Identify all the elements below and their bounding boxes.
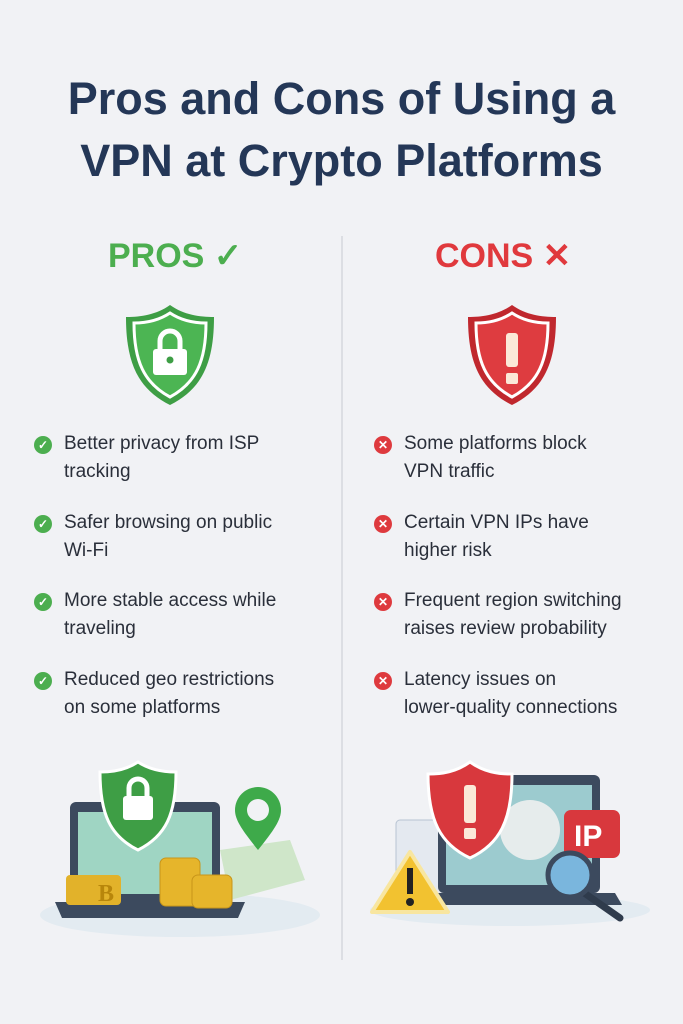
list: cons: Latency issues on bbox=[404, 669, 556, 690]
list: pros: Wi-Fi bbox=[64, 540, 108, 561]
illustration: cons laptop bbox=[370, 760, 650, 926]
heading: cons: CONS ✕ bbox=[435, 237, 571, 275]
illustration: pros laptop bbox=[40, 760, 320, 937]
list: pros: Better privacy from ISP bbox=[64, 433, 259, 454]
list: pros: ✓ bbox=[38, 595, 48, 609]
heading: pros: PROS ✓ bbox=[108, 237, 242, 275]
con item 3 bbox=[374, 590, 622, 639]
list: cons bbox=[374, 433, 622, 718]
list: cons: raises review probability bbox=[404, 618, 607, 639]
list: cons: Certain VPN IPs have bbox=[404, 512, 589, 533]
list: pros: ✓ bbox=[38, 517, 48, 531]
list: cons: ✕ bbox=[378, 674, 388, 688]
pro item 2 bbox=[34, 512, 272, 561]
list: pros: on some platforms bbox=[64, 697, 220, 718]
list: cons: VPN traffic bbox=[404, 461, 494, 482]
list: pros: Reduced geo restrictions bbox=[64, 669, 274, 690]
con item 4 bbox=[374, 669, 617, 718]
list: cons: ✕ bbox=[378, 438, 388, 452]
list: cons: higher risk bbox=[404, 540, 492, 561]
list: pros: tracking bbox=[64, 461, 131, 482]
illustration: cons laptop: IP bbox=[574, 820, 602, 853]
list: cons: ✕ bbox=[378, 595, 388, 609]
title: Pros and Cons of Using a bbox=[68, 73, 615, 124]
list: cons: lower-quality connections bbox=[404, 697, 617, 718]
list: pros: More stable access while bbox=[64, 590, 276, 611]
list: cons: ✕ bbox=[378, 517, 388, 531]
list: cons: Frequent region switching bbox=[404, 590, 622, 611]
con item 1 bbox=[374, 433, 587, 482]
illustration: pros laptop: B bbox=[98, 881, 114, 907]
list: pros bbox=[34, 433, 276, 718]
pro item 4 bbox=[34, 669, 274, 718]
pro item 1 bbox=[34, 433, 259, 482]
icon: green shield bbox=[126, 305, 214, 405]
list: pros: ✓ bbox=[38, 438, 48, 452]
list: cons: Some platforms block bbox=[404, 433, 587, 454]
icon: red shield bbox=[468, 305, 556, 405]
list: pros: traveling bbox=[64, 618, 136, 639]
list: pros: ✓ bbox=[38, 674, 48, 688]
list: pros: Safer browsing on public bbox=[64, 512, 272, 533]
title: VPN at Crypto Platforms bbox=[80, 135, 603, 186]
title bbox=[68, 73, 616, 186]
con item 2 bbox=[374, 512, 589, 561]
divider bbox=[341, 236, 343, 960]
pro item 3 bbox=[34, 590, 276, 639]
